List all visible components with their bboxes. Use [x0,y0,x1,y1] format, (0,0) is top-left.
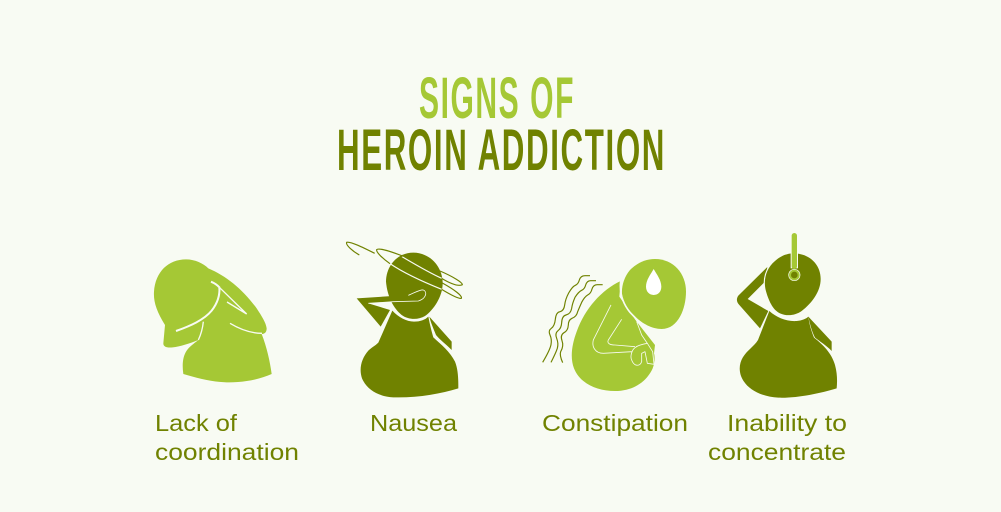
label: lack of coordination: Lack of [155,410,238,436]
right arm [429,317,452,350]
icon: inability to concentrate figure [737,236,837,398]
title line: signs of: SIGNS OF [419,66,575,131]
label: lack of coordination [155,410,299,465]
body [361,311,458,397]
icon: stink waves [543,276,603,363]
icon: constipation figure [572,259,686,391]
icon: nausea figure [347,242,462,397]
label: inability to concentrate: Inability to [727,410,847,436]
dizzy rings [347,242,462,298]
right arm [808,317,832,351]
title line: heroin addiction: HEROIN ADDICTION [337,118,666,183]
arm behind head [737,267,768,328]
label: constipation: Constipation [542,410,688,436]
label: inability to concentrate [708,410,847,465]
head [622,259,686,329]
title [337,66,666,183]
head [765,253,821,315]
label: lack of coordination: coordination [155,439,299,465]
raised arm [357,290,426,327]
label: inability to concentrate: concentrate [708,439,846,465]
body lines [593,305,654,365]
head [386,253,443,319]
icon: exclamation mark [788,236,800,281]
body [740,311,837,398]
icon: sweat drop [646,269,661,295]
label: nausea: Nausea [370,410,457,436]
body [572,281,655,391]
icon: lack of coordination figure [154,259,272,382]
